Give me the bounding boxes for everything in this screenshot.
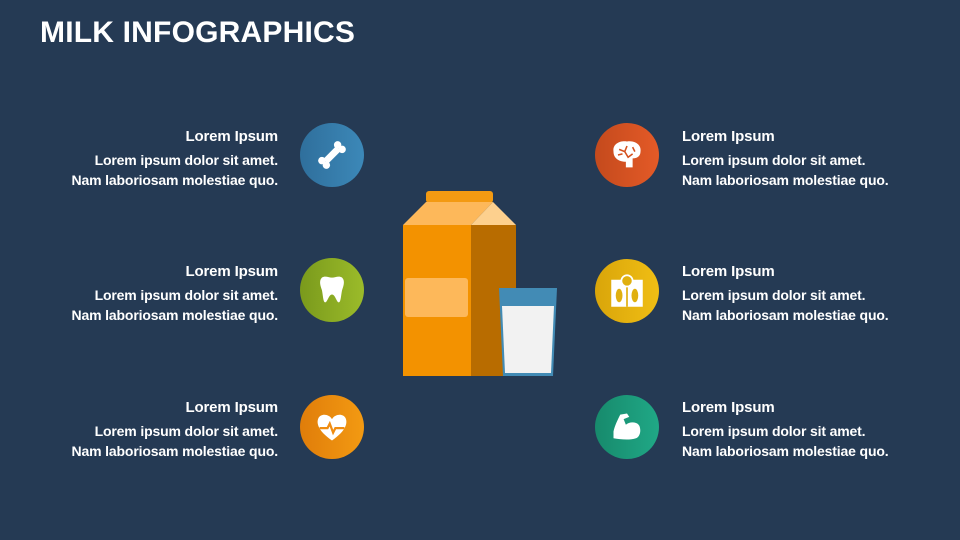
title: MILK INFOGRAPHICS	[40, 16, 355, 49]
text: right 1: Lorem ipsum dolor sit amet.	[682, 152, 865, 168]
carton cap	[426, 191, 493, 203]
text: right 2: Lorem ipsum dolor sit amet.	[682, 287, 865, 303]
text: right 3: Lorem ipsum dolor sit amet.	[682, 423, 865, 439]
text: left 3: Lorem Ipsum	[185, 399, 278, 416]
text: left 1: Lorem Ipsum	[185, 128, 278, 145]
text: left 2: Nam laboriosam molestiae quo.	[72, 307, 278, 323]
text: right 2	[682, 263, 888, 323]
icon: muscle	[595, 395, 659, 459]
text: right 1	[682, 128, 888, 188]
text: right 1: Nam laboriosam molestiae quo.	[682, 172, 888, 188]
carton roof	[403, 202, 493, 225]
carton body	[403, 225, 471, 376]
text: left 1	[72, 128, 278, 188]
text: right 3: Nam laboriosam molestiae quo.	[682, 443, 888, 459]
icon: bone	[300, 123, 364, 187]
text: left 1: Lorem ipsum dolor sit amet.	[95, 152, 278, 168]
text: left 3: Nam laboriosam molestiae quo.	[72, 443, 278, 459]
text: right 2: Nam laboriosam molestiae quo.	[682, 307, 888, 323]
text: right 2: Lorem Ipsum	[682, 263, 775, 280]
icon: heart	[300, 395, 364, 459]
carton label	[405, 278, 468, 317]
milk carton and glass	[403, 191, 557, 376]
text: left 3: Lorem ipsum dolor sit amet.	[95, 423, 278, 439]
glass	[499, 288, 557, 376]
text: right 3	[682, 399, 888, 459]
text: left 1: Nam laboriosam molestiae quo.	[72, 172, 278, 188]
icon: scale	[595, 259, 659, 323]
text: left 3	[72, 399, 278, 459]
icon: tooth	[300, 258, 364, 322]
text: right 1: Lorem Ipsum	[682, 128, 775, 145]
text: left 2	[72, 263, 278, 323]
text: left 2: Lorem ipsum dolor sit amet.	[95, 287, 278, 303]
text: right 3: Lorem Ipsum	[682, 399, 775, 416]
text: left 2: Lorem Ipsum	[185, 263, 278, 280]
icon: brain	[595, 123, 659, 187]
